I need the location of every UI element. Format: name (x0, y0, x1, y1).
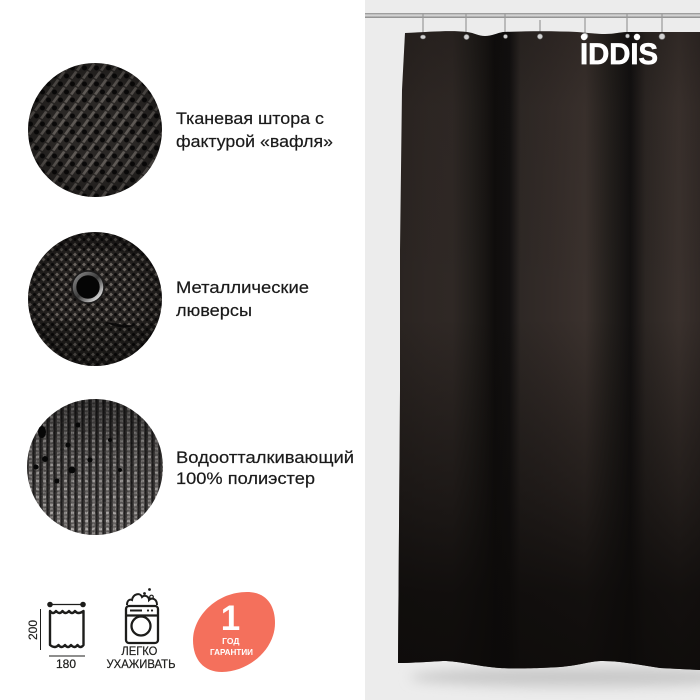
label: easy care: УХАЖИВАТЬ (106, 659, 176, 671)
swatch: grommet closeup (28, 230, 162, 366)
fabric fold (28, 230, 162, 366)
washer body (126, 606, 158, 643)
badge text: ГОД (222, 636, 239, 646)
icon: rod (48, 602, 85, 607)
icon: easy care washing machine (106, 588, 176, 671)
dimension line: height (40, 609, 42, 650)
feature 1: waffle texture (28, 63, 333, 197)
curtain hooks (423, 14, 662, 33)
washer controls (130, 609, 153, 612)
curtain fabric (398, 31, 700, 670)
text: water repellent: Водоотталкивающий (176, 448, 354, 467)
curtain rod (365, 13, 700, 18)
badge number: 1 (221, 599, 240, 638)
logo: IDDIS: IDDIS (580, 38, 658, 71)
badge text: ГАРАНТИИ (210, 647, 253, 657)
grommet (71, 270, 105, 304)
photo backdrop (365, 0, 700, 700)
curtain shading (398, 31, 700, 670)
foam and bubbles (127, 588, 157, 605)
dimension line: width (49, 655, 85, 657)
swatch: water drops on fabric (27, 399, 163, 535)
text: waffle fabric: фактурой «вафля» (176, 132, 333, 151)
feature 2: metal grommets (28, 230, 314, 366)
badge blob (193, 592, 275, 672)
floor shadow (410, 667, 700, 687)
label: 180: 180 (56, 657, 76, 671)
text: metal grommets: Металлические (176, 278, 309, 297)
label: easy care: ЛЕГКО (121, 646, 157, 658)
label: 200: 200 (26, 620, 40, 640)
icon: curtain outline (50, 611, 84, 647)
water drops (34, 422, 122, 484)
feature 3: water repellent polyester (27, 399, 359, 535)
text: metal grommets: люверсы (176, 301, 252, 320)
panel: curtain photo (365, 0, 700, 700)
curtain grommets (420, 33, 665, 40)
icon: dimensions 180 x 200 (26, 602, 85, 671)
text: water repellent: 100% полиэстер (176, 469, 315, 488)
badge: 1 year warranty (193, 592, 275, 672)
text: waffle fabric: Тканевая штора с (176, 109, 325, 128)
swatch: waffle fabric (28, 63, 162, 197)
